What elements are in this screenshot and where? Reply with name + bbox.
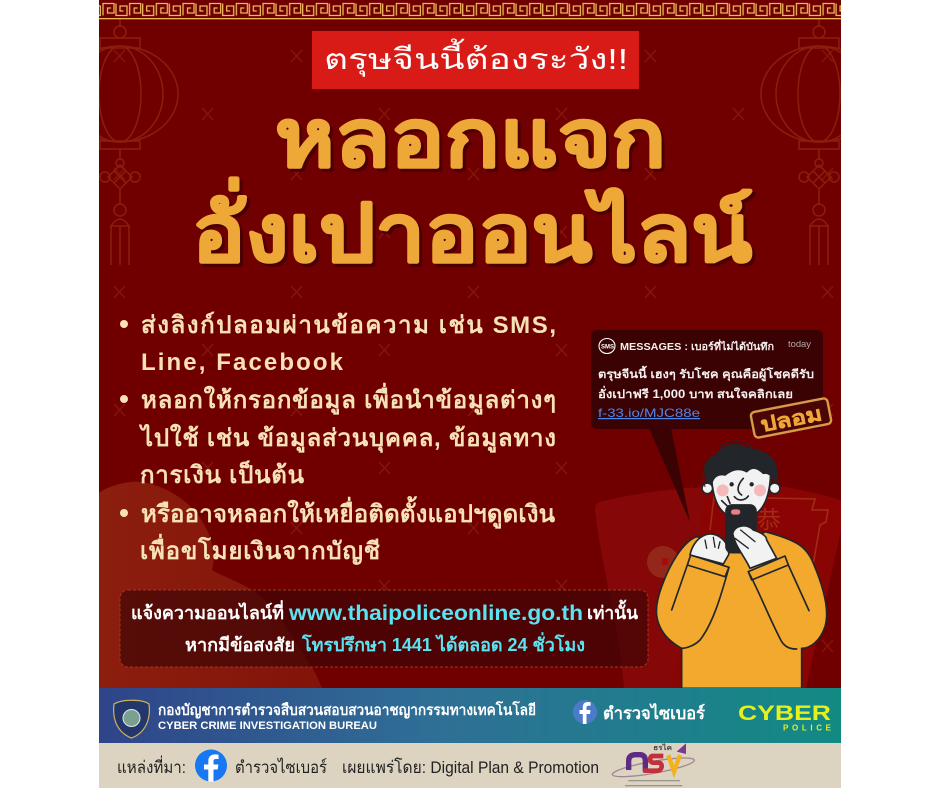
icon: police badge xyxy=(114,700,149,738)
bullet list xyxy=(120,311,556,565)
SMS message card: MESSAGES : เบอร์ที่ไม่ได้บันทึก xyxy=(620,339,774,353)
background: right lantern xyxy=(760,19,841,265)
background: red envelope right: 恭 xyxy=(757,507,781,534)
footer bar: bureau: กองบัญชาการตำรวจสืบสวนสอบสวนอาชญากรรมทางเทคโนโลยี xyxy=(158,700,536,719)
sweater xyxy=(656,532,827,688)
footer: source credit: แหล่งที่มา: xyxy=(117,755,186,777)
footer bar: bureau: CYBER CRIME INVESTIGATION BUREAU xyxy=(158,720,377,732)
logo: NSV: ธรไค xyxy=(653,743,672,752)
callout: report online: โทรปรึกษา 1441 ได้ตลอด 24 ชั่วโมง xyxy=(301,632,585,655)
footer bar: bureau: ตำรวจไซเบอร์ xyxy=(603,703,706,723)
callout: report online xyxy=(120,590,648,667)
bullet list: ไปใช้ เช่น ข้อมูลส่วนบุคคล, ข้อมูลทาง xyxy=(138,423,556,454)
SMS message card xyxy=(591,330,823,522)
footer: source credit: เผยแพร่โดย: Digital Plan & Promotion xyxy=(342,757,599,777)
stamp: fake xyxy=(750,398,832,438)
illustration: person with phone xyxy=(656,441,827,688)
heading badge xyxy=(312,31,639,89)
stamp: fake: ปลอม xyxy=(759,403,824,437)
logo: cyber police xyxy=(738,702,832,732)
head xyxy=(702,441,780,518)
title: อั่งเปาออนไลน์ xyxy=(192,177,753,278)
logo: cyber police: CYBER xyxy=(738,702,831,725)
heading badge: ตรุษจีนนี้ต้องระวัง!! xyxy=(324,38,628,77)
title: อั่งเปาออนไลน์ xyxy=(195,180,756,281)
footer: source credit xyxy=(99,743,841,788)
icon: SMS bubble xyxy=(599,338,615,354)
callout: report online: แจ้งความออนไลน์ที่ xyxy=(131,600,284,623)
right hand xyxy=(733,526,777,568)
SMS message card: ตรุษจีนนี้ เฮงๆ รับโชค คุณคือผู้โชคดีรับ xyxy=(598,365,814,382)
title xyxy=(192,94,756,281)
bullet list: หลอกให้กรอกข้อมูล เพื่อนำข้อมูลต่างๆ xyxy=(141,382,556,415)
SMS message card: today xyxy=(788,339,812,349)
background: red envelope left xyxy=(595,487,707,688)
phone xyxy=(726,505,756,553)
background: red envelope right xyxy=(672,484,841,688)
icon: facebook source xyxy=(195,750,227,782)
SMS message card: f-33.io/MJC88e xyxy=(598,406,700,420)
sleeve lines xyxy=(672,555,809,649)
bullet list: Line, Facebook xyxy=(141,349,344,376)
panel: red background xyxy=(99,0,841,688)
bullet list: เพื่อขโมยเงินจากบัญชี xyxy=(140,533,380,565)
icon: facebook xyxy=(573,700,597,724)
background: left lantern xyxy=(99,19,179,265)
callout: report online: หากมีข้อสงสัย xyxy=(185,635,295,655)
logo: cyber police: POLICE xyxy=(783,724,832,732)
top ornamental border xyxy=(99,0,841,19)
bullet list: การเงิน เป็นต้น xyxy=(140,460,305,489)
logo: NSV xyxy=(611,743,695,786)
left fist xyxy=(690,534,729,564)
title: หลอกแจก xyxy=(275,94,666,183)
footer: source credit: ตำรวจไซเบอร์ xyxy=(235,757,327,777)
icon: SMS bubble: SMS xyxy=(601,344,614,350)
bullet list: หรืออาจหลอกให้เหยื่อติดตั้งแอปฯดูดเงิน xyxy=(141,495,556,529)
callout: report online: เท่านั้น xyxy=(587,599,639,623)
callout: report online: www.thaipoliceonline.go.th xyxy=(288,602,583,625)
footer bar: bureau xyxy=(99,688,841,743)
title: หลอกแจก xyxy=(278,97,669,186)
background: clouds xyxy=(99,482,322,688)
SMS message card: อั่งเปาฟรี 1,000 บาท สนใจคลิกเลย xyxy=(598,385,793,401)
bullet list: ส่งลิงก์ปลอมผ่านข้อความ เช่น SMS, xyxy=(141,311,556,339)
